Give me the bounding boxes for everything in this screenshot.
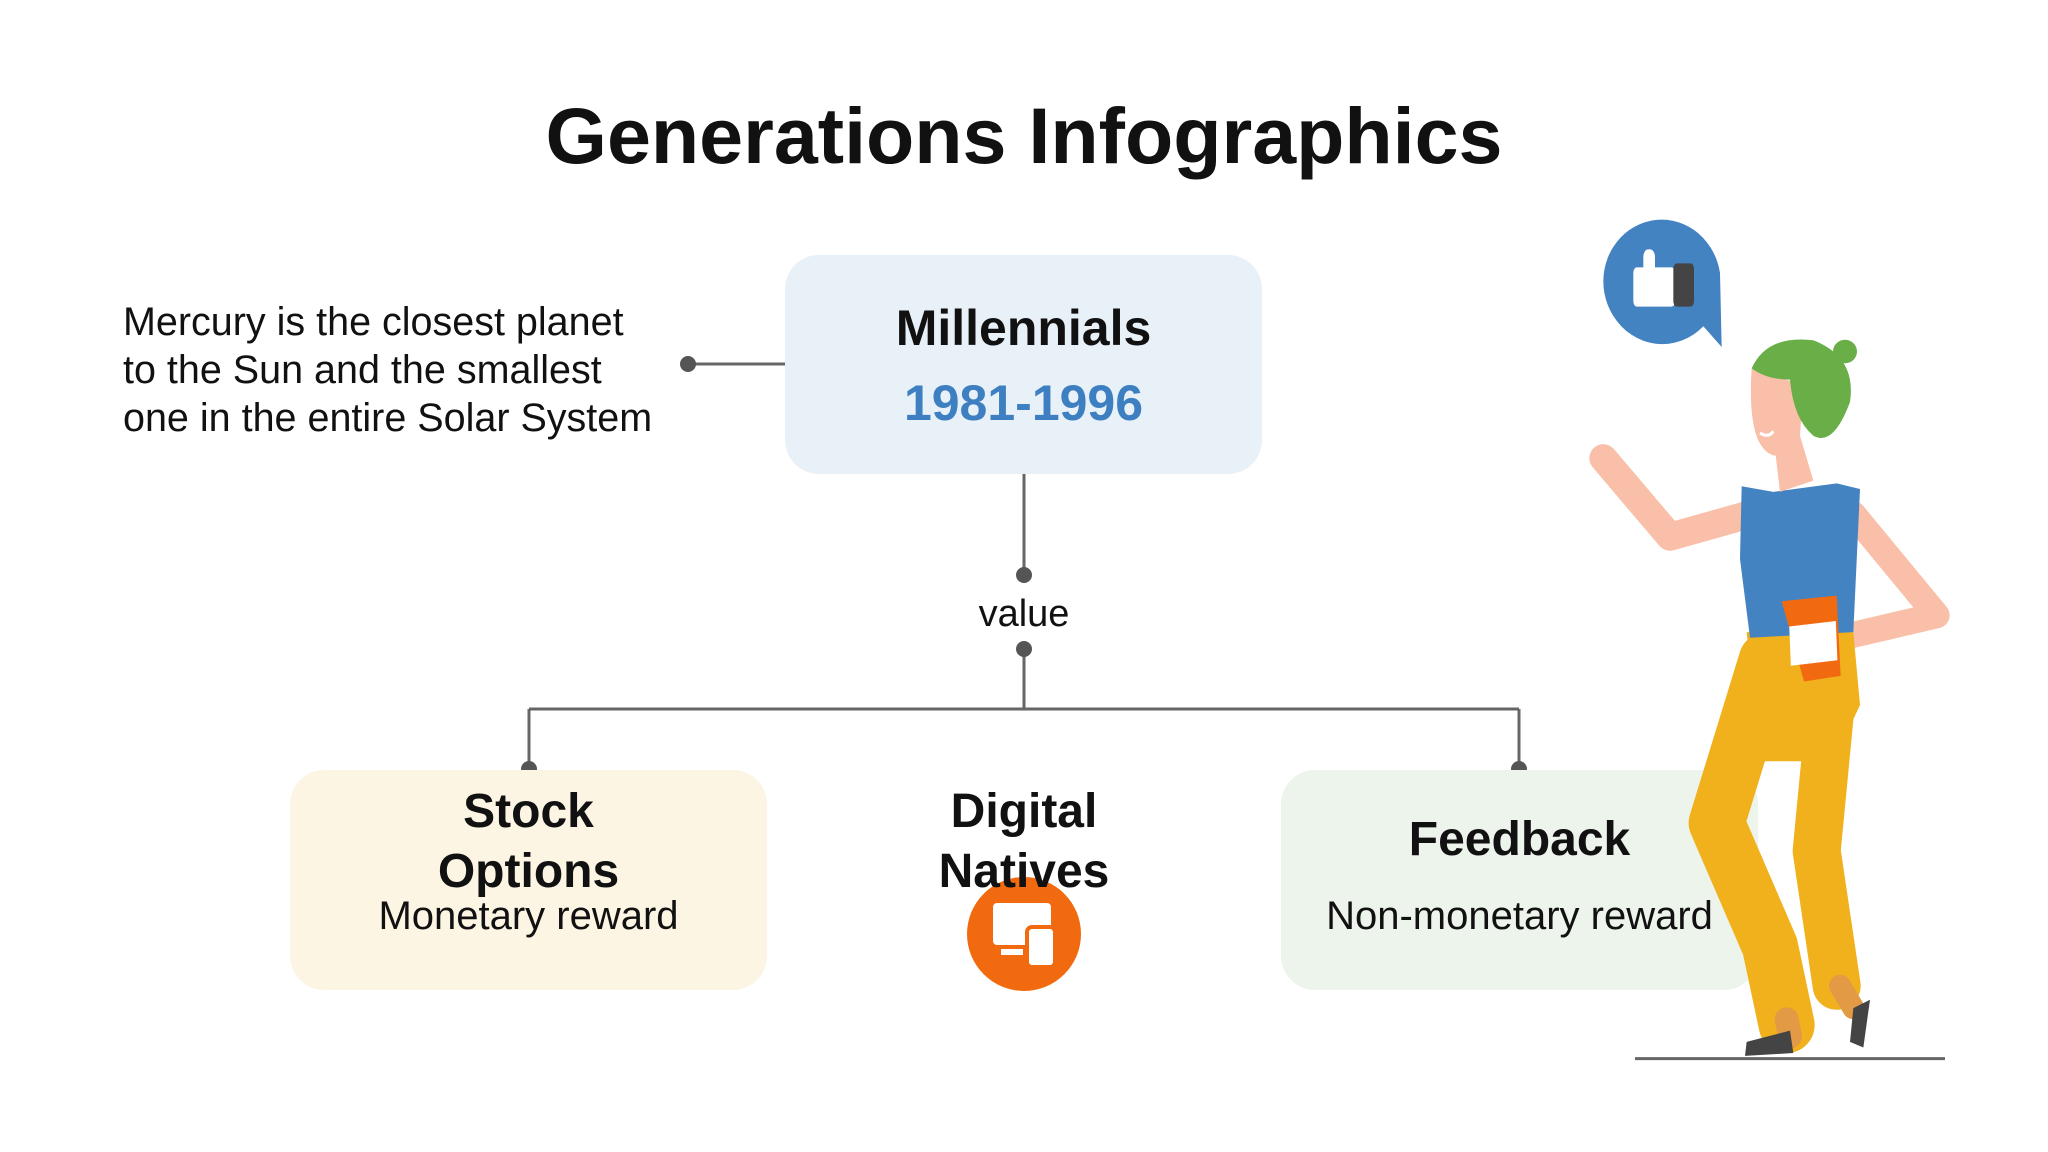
panel: millennials: Millennials [896,300,1151,356]
text block: description: to the Sun and the smallest [123,348,602,392]
text block: description [123,300,652,440]
panel: digital natives [939,785,1109,991]
illustration: woman with thumbs-up bubble [1589,220,1950,1060]
text block: description: Mercury is the closest planet [123,300,624,344]
panel: digital natives: Digital [951,785,1097,838]
title: Generations Infographics [546,91,1502,180]
label: value: value [979,593,1069,635]
panel: millennials: 1981-1996 [904,375,1143,431]
text block: description: one in the entire Solar System [123,396,652,440]
panel: millennials [785,255,1262,474]
panel: stock options [290,770,767,990]
panel: feedback: Feedback [1409,813,1630,866]
panel: stock options: Options [438,845,619,898]
panel: feedback: Non-monetary reward [1326,894,1713,938]
panel: feedback [1281,770,1758,990]
panel: digital natives: Natives [939,845,1109,898]
panel: stock options: Stock [463,785,594,838]
panel: stock options: Monetary reward [378,894,679,938]
icon: devices [967,877,1081,991]
ground line [1635,1057,1945,1060]
icon: thumbs up bubble [1603,220,1722,347]
